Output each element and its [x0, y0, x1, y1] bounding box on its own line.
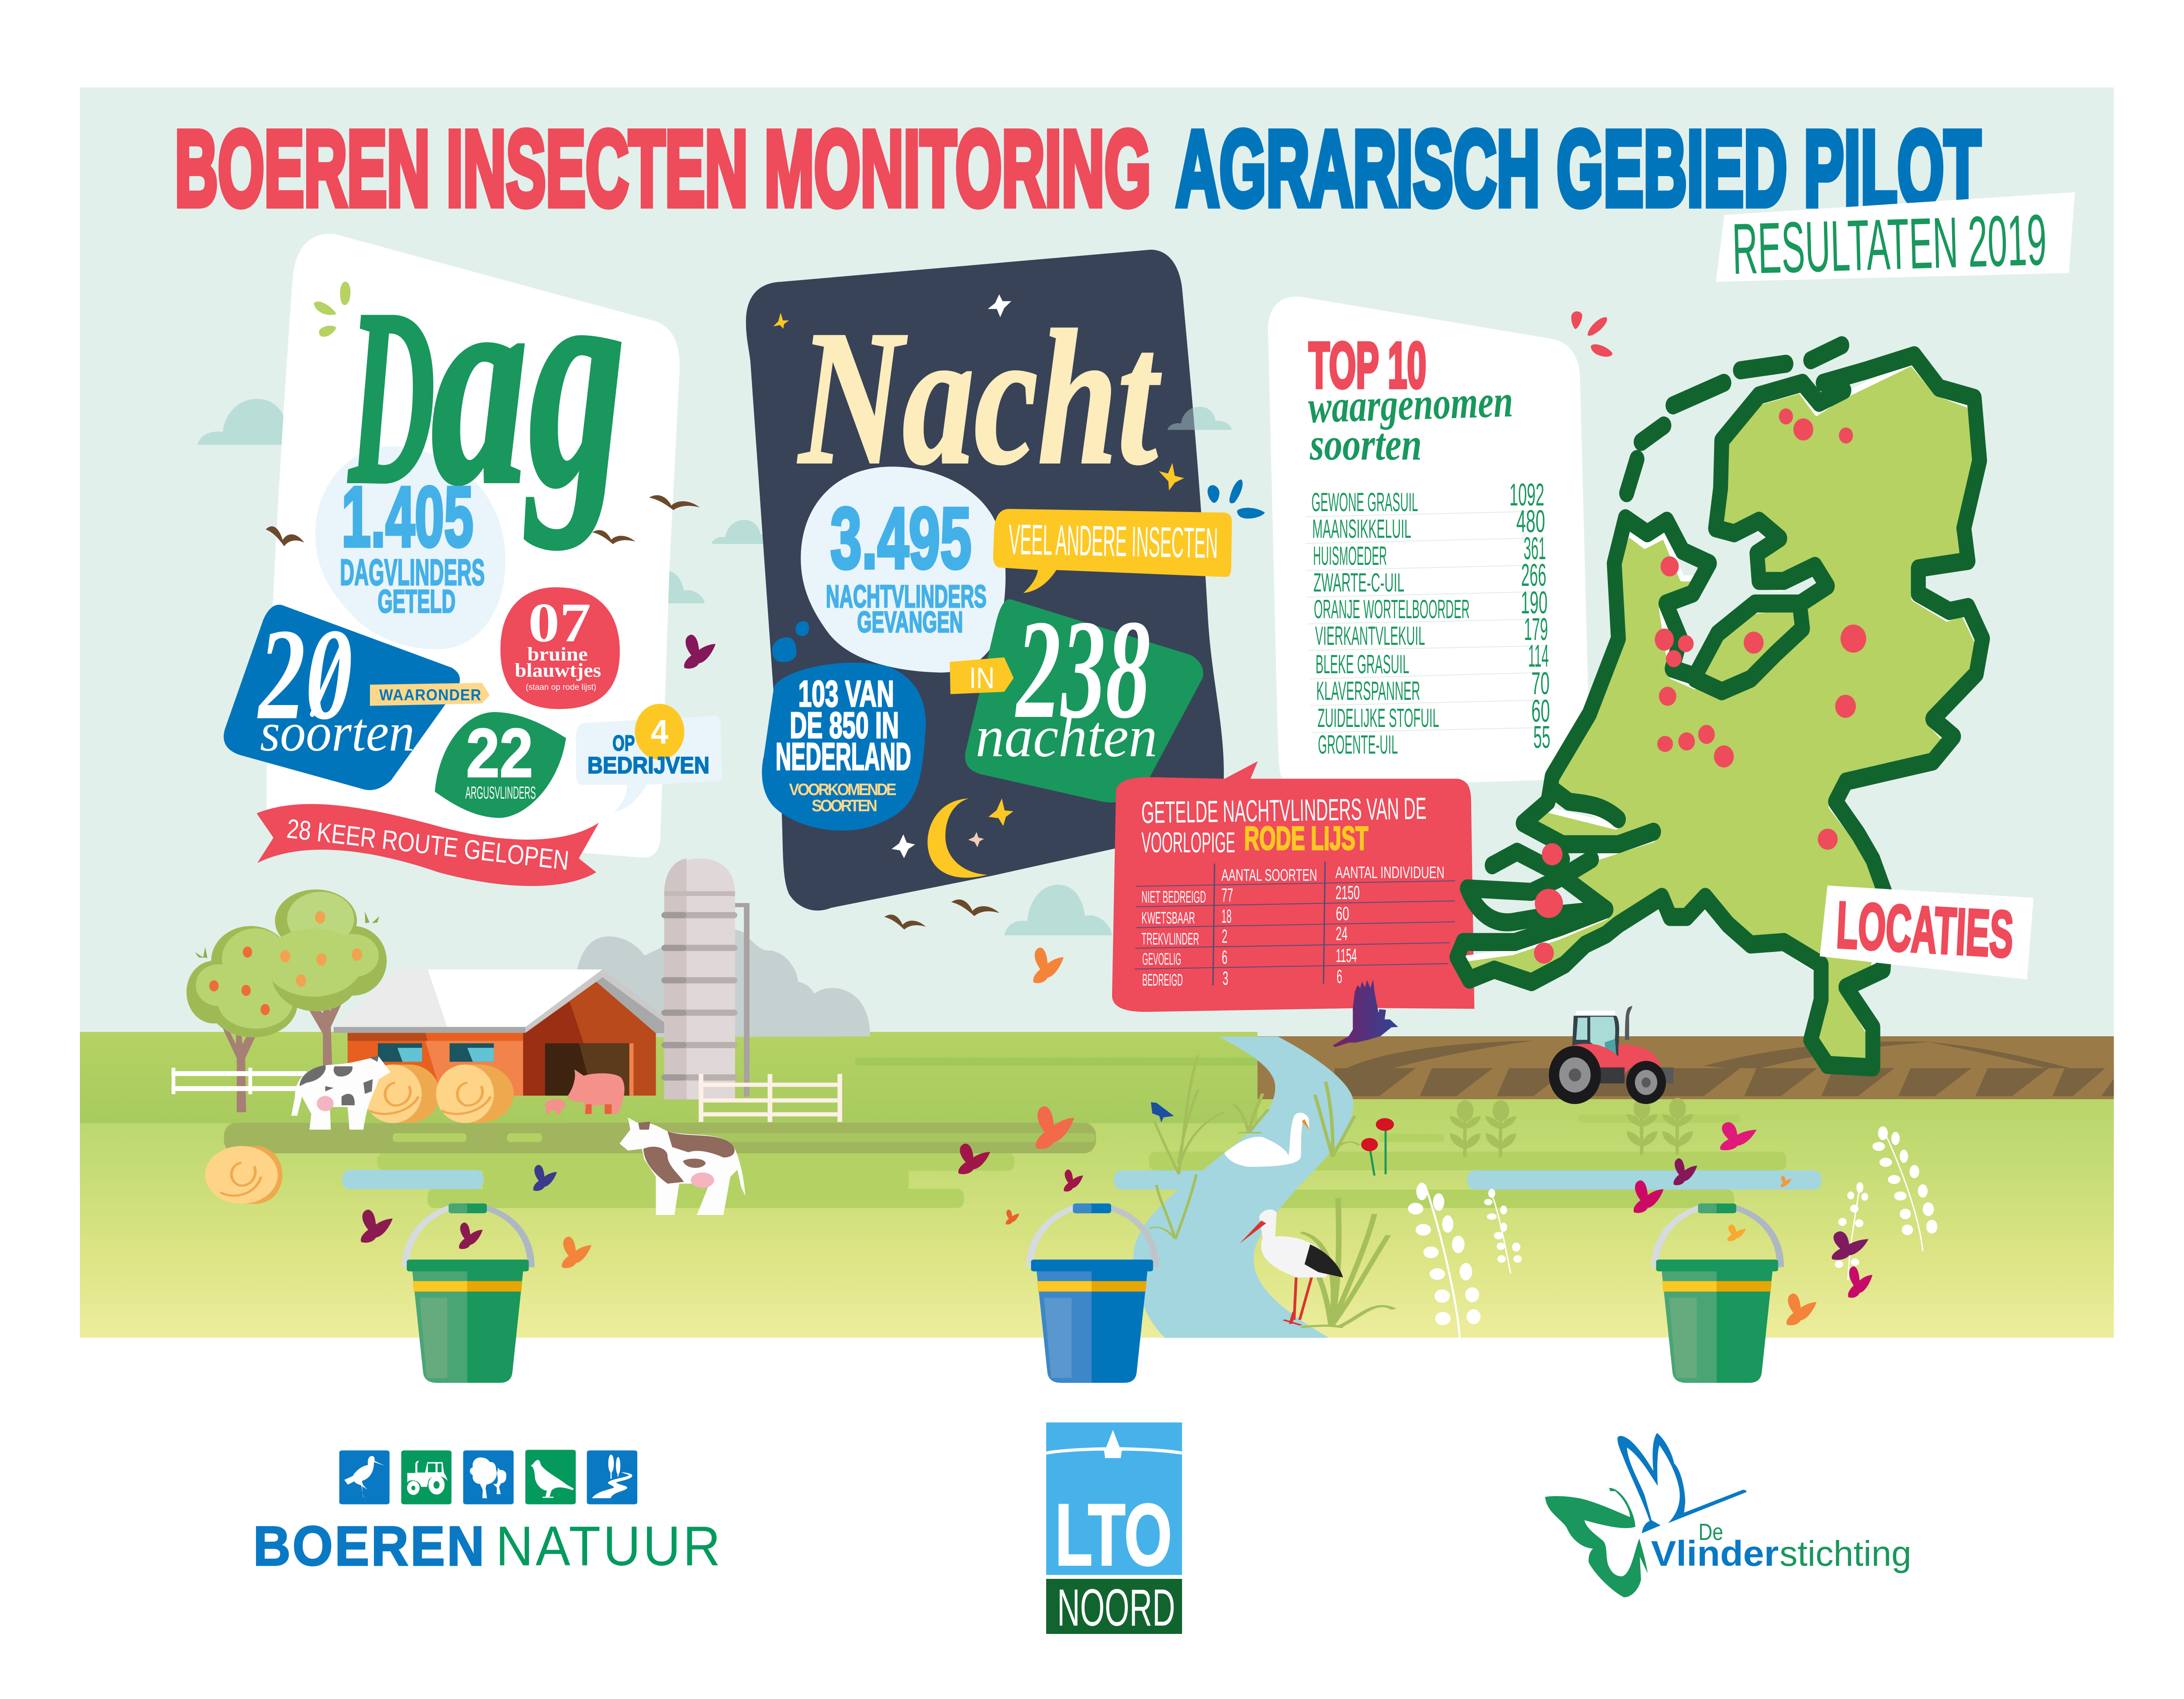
bubble: 3.495 nachtvlinders: 3.495 [830, 490, 971, 586]
ribbon: 28 keer route gelopen: 28 KEER ROUTE GELOPEN [285, 813, 570, 876]
bubble: dagvlinders background [315, 446, 505, 649]
illustration: white fence [172, 1068, 307, 1094]
tag: in: IN [969, 661, 995, 695]
bubble: op 4 bedrijven: 4 [651, 713, 668, 751]
table: red list: BEDREIGD [1142, 971, 1183, 989]
illustration: swan [1224, 1113, 1310, 1167]
table: species: BLEKE GRASUIL [1316, 650, 1409, 679]
panel: top 10 [1268, 297, 1593, 787]
logo wordmark: Vlinder [1651, 1533, 1779, 1574]
illustration: wheat sprouts [1450, 1098, 1693, 1157]
badge: 20 soorten [224, 602, 460, 790]
table: species: 480 [1516, 504, 1545, 539]
tag: in [950, 657, 1014, 695]
water strips [342, 1170, 1821, 1190]
icon: green splash [314, 282, 350, 337]
heading: rode lijst [1141, 792, 1427, 859]
illustration: gray clouds [572, 929, 870, 1038]
illustration: white plants [1408, 1126, 1937, 1338]
illustration: tractor [1549, 1006, 1673, 1104]
text: 1.405 dagvlinders: DAGVLINDERS [340, 552, 485, 593]
bubble: op 4 bedrijven: BEDRIJVEN [587, 752, 709, 779]
text: 1.405 dagvlinders: GETELD [378, 584, 456, 620]
logo: boerennatuur [253, 1450, 720, 1578]
table: species: ZWARTE-C-UIL [1313, 568, 1404, 597]
label: locaties [1820, 886, 2033, 979]
clouds [197, 399, 1232, 935]
ploughed field [1258, 1036, 2114, 1099]
table: species: GEWONE GRASUIL [1311, 488, 1418, 517]
table: species: 179 [1524, 612, 1548, 647]
table: red list: 18 [1221, 906, 1231, 927]
map outline [1457, 345, 1983, 1067]
table: species: KLAVERSPANNER [1317, 677, 1420, 706]
map land [1458, 363, 1978, 1070]
logo wordmark: stichting [1780, 1533, 1911, 1574]
logo wordmark: NATUUR [496, 1515, 720, 1578]
label: locaties: LOCATIES [1835, 888, 2015, 971]
table: species: ZUIDELIJKE STOFUIL [1317, 704, 1439, 733]
heading: nacht: Nacht [797, 291, 1162, 504]
panel: rode lijst [1112, 761, 1474, 1012]
logo wordmark [1651, 1519, 1911, 1574]
title: BOEREN INSECTEN MONITORING [175, 109, 1151, 228]
badge: 07 bruine blauwtjes: blauwtjes [515, 660, 601, 681]
table: red list: KWETSBAAR [1141, 909, 1195, 927]
badge: 238 nachten [965, 591, 1203, 803]
badge: 103 van de 850: DE 850 IN [790, 705, 899, 746]
logo wordmark: De [1698, 1519, 1723, 1545]
bubble: op 4 bedrijven [576, 704, 722, 813]
subheading: waargenomen [1307, 376, 1514, 433]
table: species: GROENTE-UIL [1318, 730, 1398, 759]
logo wordmark: BOEREN [253, 1515, 484, 1578]
illustration: hay bales [205, 1065, 514, 1204]
illustration: small blue bird [1151, 1102, 1174, 1123]
badge: 103 van de 850 [762, 663, 926, 830]
subheading: soorten [1310, 419, 1422, 470]
table: red list: 60 [1336, 903, 1349, 924]
panel: top 10: 114 [1528, 638, 1549, 674]
river [1133, 1037, 1354, 1338]
bubble: 3.495 nachtvlinders: GEVANGEN [857, 606, 963, 639]
table: red list [1141, 863, 1444, 989]
logo: lto noord: LTO [1055, 1486, 1172, 1583]
illustration: barn [334, 969, 679, 1096]
map locations [1534, 408, 1866, 964]
heading: dag: a [432, 223, 527, 543]
background panel [80, 87, 2114, 1338]
bucket: green left [405, 1204, 531, 1383]
badge: 103 van de 850: NEDERLAND [776, 735, 911, 778]
logo: lto noord [1046, 1422, 1182, 1637]
text: VEEL ANDERE INSECTEN [1008, 516, 1218, 567]
table: red list: 6 [1337, 966, 1342, 987]
heading: dag: D [347, 259, 435, 534]
illustration: brown and white cow [619, 1118, 745, 1215]
icon: blue splash [1208, 480, 1265, 519]
badge: 07 bruine blauwtjes: (staan op rode lijst) [526, 682, 596, 692]
badge: 07 bruine blauwtjes: bruine [527, 644, 588, 665]
bubble: 3.495 nachtvlinders: NACHTVLINDERS [826, 579, 987, 614]
cloud over panel [1168, 407, 1232, 430]
table: red list: 2150 [1335, 882, 1360, 903]
callout: veel andere insecten [993, 509, 1232, 593]
heading: top 10: TOP 10 [1309, 329, 1426, 401]
illustration: silo [661, 858, 746, 1099]
table: species: 361 [1524, 531, 1546, 566]
table: species: 60 [1531, 693, 1550, 729]
icon: moon [927, 799, 988, 878]
table: species: 266 [1521, 557, 1546, 593]
badge: 238 nachten: 238 [1015, 591, 1151, 747]
badge: 22 argusvlinders [435, 712, 566, 818]
table: red list: 3 [1223, 968, 1228, 989]
heading: dag [347, 209, 625, 550]
subheading [1307, 376, 1514, 470]
table: red list: 1154 [1336, 945, 1357, 966]
illustration: buckets [405, 1204, 1780, 1383]
logo butterfly [1545, 1433, 1746, 1597]
tag: waaronder: WAARONDER [379, 687, 481, 704]
illustration: butterflies [361, 635, 1873, 1325]
table: red list: AANTAL INDIVIDUEN [1335, 863, 1444, 882]
badge: 238 nachten: nachten [975, 704, 1158, 769]
heading: rode lijst: GETELDE NACHTVLINDERS VAN DE [1141, 792, 1427, 830]
bubble: op 4 bedrijven: OP [612, 731, 635, 755]
tag: waaronder [370, 683, 490, 706]
icon: red splash [1571, 311, 1613, 357]
bucket: green right [1655, 1204, 1780, 1383]
illustration: trees [187, 889, 387, 1112]
badge: 20 soorten: soorten [260, 702, 415, 763]
table: red list: GEVOELIG [1142, 950, 1181, 968]
table: species: MAANSIKKELUIL [1312, 515, 1411, 543]
table: species: 190 [1521, 585, 1548, 620]
table: red list: 77 [1221, 885, 1233, 906]
badge: 22 argusvlinders: 22 [466, 715, 533, 792]
table: species: VIERKANTVLEKUIL [1315, 622, 1425, 651]
icon: blue dots [772, 621, 809, 662]
table lines [1134, 862, 1455, 986]
table: red list: 6 [1222, 947, 1227, 968]
table: red list: 24 [1336, 923, 1348, 944]
bucket: blue middle [1030, 1204, 1155, 1383]
badge: 22 argusvlinders: ARGUSVLINDERS [465, 783, 536, 803]
logo mark [1046, 1430, 1182, 1458]
table: species: ORANJE WORTELBOORDER [1314, 595, 1470, 624]
table: red list: AANTAL SOORTEN [1221, 866, 1317, 884]
badge: 20 soorten: 20 [257, 602, 352, 747]
table: species: 70 [1531, 666, 1550, 701]
badge: 103 van de 850: 103 VAN [798, 674, 894, 715]
heading: rode lijst: RODE LIJST [1244, 820, 1368, 857]
illustration: pig [545, 1069, 625, 1114]
badge: 07 bruine blauwtjes: 07 [528, 592, 591, 654]
logo wordmark [253, 1515, 720, 1578]
illustration: black and white cow [291, 1055, 390, 1130]
table: species [1311, 477, 1550, 759]
landscape ground [80, 1032, 2114, 1338]
badge: 103 van de 850: VOORKOMENDE [789, 780, 896, 799]
stars [773, 294, 1184, 858]
table: species: HUISMOEDER [1313, 542, 1387, 571]
table: species: 1092 [1510, 477, 1544, 512]
logo: vlinderstichting [1545, 1433, 1911, 1597]
illustration: cream fence [699, 1074, 842, 1122]
logo: lto noord: NOORD [1057, 1578, 1175, 1637]
badge: 103 van de 850: SOORTEN [812, 796, 878, 815]
table: red list: TREKVLINDER [1141, 930, 1199, 948]
table: red list: NIET BEDREIGD [1141, 888, 1206, 906]
illustration: tulips [1361, 1118, 1394, 1176]
table: red list: 2 [1222, 926, 1227, 947]
text: 1.405 dagvlinders [340, 469, 485, 620]
badge: 07 bruine blauwtjes [501, 587, 620, 709]
map: netherlands [1457, 345, 1983, 1070]
illustration: stork [1240, 1209, 1343, 1325]
text: 1.405 dagvlinders: 1.405 [342, 469, 473, 564]
illustration: purple bird [1333, 979, 1398, 1047]
illustration: reeds [1150, 1055, 1394, 1327]
table: species: 55 [1533, 720, 1550, 755]
heading: rode lijst: VOORLOPIGE [1141, 827, 1235, 859]
heading: dag: g [523, 209, 625, 550]
bubble: 3.495 nachtvlinders [801, 467, 1006, 672]
logo icons [339, 1450, 637, 1504]
birds [266, 495, 999, 930]
panel: nacht [746, 250, 1232, 910]
panel: dag [224, 209, 722, 886]
